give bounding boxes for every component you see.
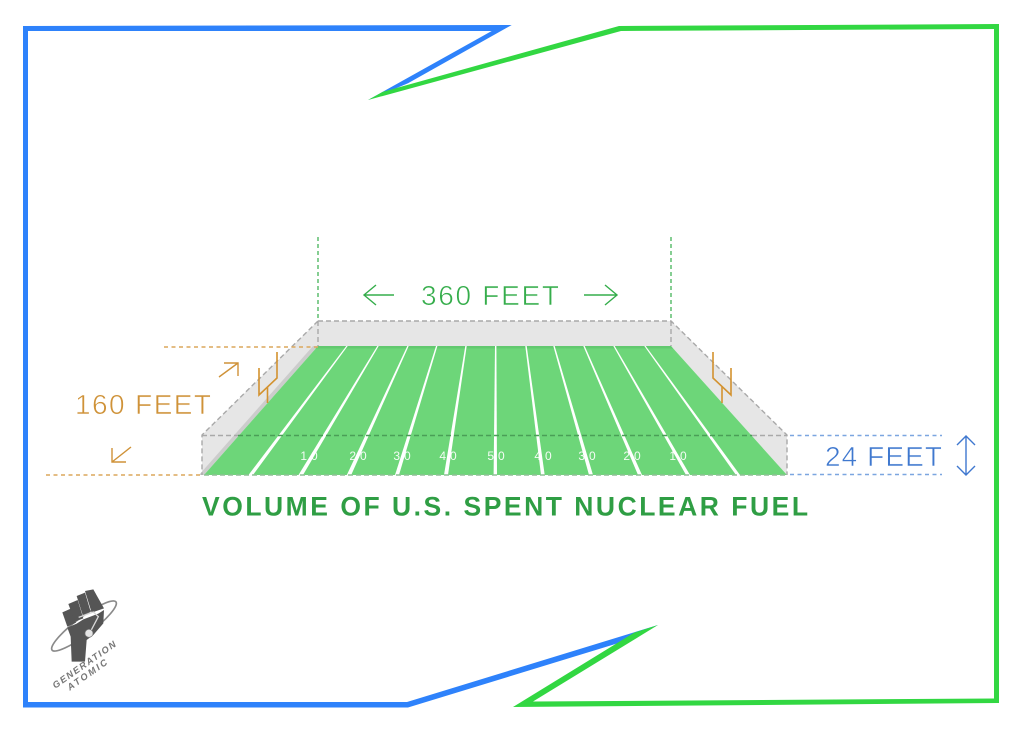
yard lines [248, 346, 740, 475]
label: 24 FEET [825, 441, 942, 472]
yard numbers [300, 449, 691, 463]
left wall shadow [199, 346, 318, 475]
yard numbers: 50 [487, 449, 509, 463]
yard numbers: 40 [439, 449, 461, 463]
back edge shadow [316, 346, 673, 348]
football field volume diagram [199, 321, 787, 475]
right side wall [671, 321, 787, 475]
yard numbers: 10 [300, 449, 322, 463]
double arrow [957, 436, 975, 475]
right goalpost [713, 352, 731, 403]
length guide lines [46, 347, 318, 475]
logo text: GENERATION [51, 639, 118, 690]
down arrow [112, 447, 131, 462]
fingers [62, 589, 104, 627]
logo: Generation Atomic [47, 589, 121, 693]
width guide lines [318, 237, 671, 321]
yard numbers: 20 [349, 449, 371, 463]
logo text: ATOMIC [64, 657, 109, 693]
label: 360 FEET [421, 280, 559, 311]
yard numbers: 40 [534, 449, 556, 463]
atom [85, 629, 93, 637]
yard numbers: 10 [669, 449, 691, 463]
24 feet dimension [790, 436, 975, 475]
yard numbers: 20 [623, 449, 645, 463]
thumb outline [79, 612, 98, 630]
back wall [318, 321, 671, 346]
yard numbers: 30 [578, 449, 600, 463]
up arrow [219, 363, 238, 377]
blue frame [23, 25, 658, 708]
green frame [368, 24, 999, 707]
ring [47, 595, 121, 657]
dashed box edges [202, 321, 787, 475]
left side wall [202, 321, 318, 475]
field surface [204, 346, 787, 475]
right arrow [584, 285, 617, 305]
palm and wrist [67, 610, 104, 662]
label: 160 FEET [75, 389, 211, 420]
left arrow [364, 285, 394, 305]
title: VOLUME OF U.S. SPENT NUCLEAR FUEL [202, 492, 808, 522]
160 feet dimension [46, 347, 318, 475]
360 feet dimension [318, 237, 671, 321]
height guide lines [790, 436, 942, 474]
yard numbers: 30 [393, 449, 415, 463]
left goalpost [259, 352, 277, 403]
